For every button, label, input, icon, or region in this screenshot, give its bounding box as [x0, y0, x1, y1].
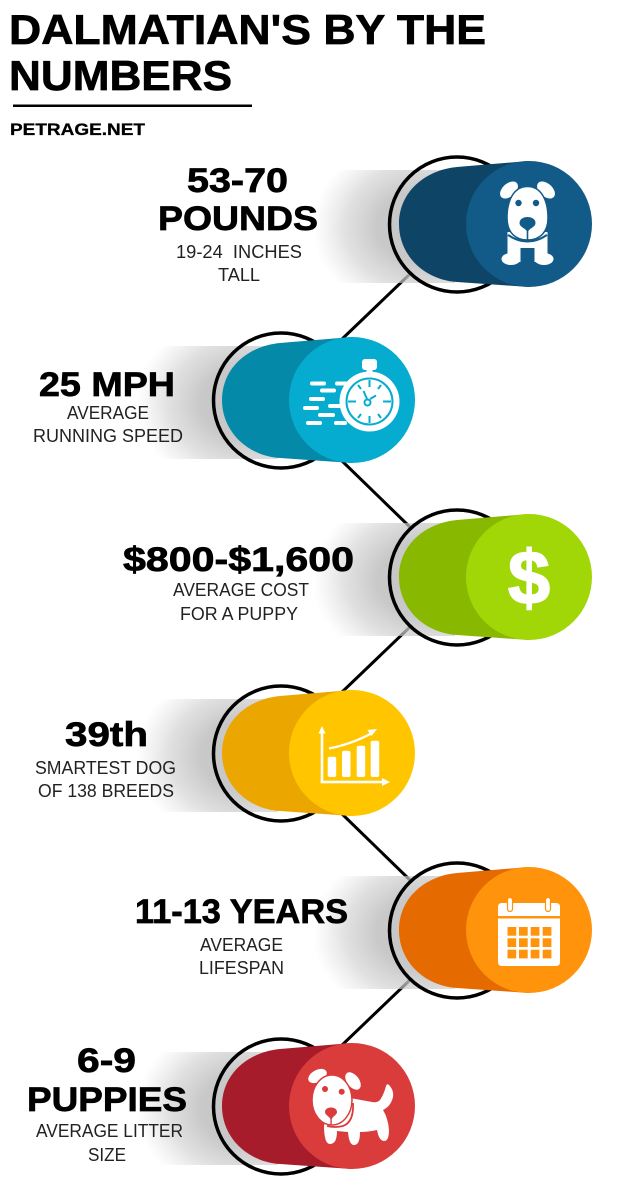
panel: speed [33, 333, 415, 468]
stat: speed [33, 366, 183, 446]
pill [222, 690, 352, 816]
stat: weight: 53-70 [187, 162, 288, 200]
shadow [315, 876, 455, 989]
shadow [315, 523, 455, 636]
panel: weight [158, 157, 592, 292]
pill [222, 1043, 352, 1169]
stat: lifespan: 11-13 YEARS [135, 893, 348, 931]
shadow [315, 170, 455, 283]
pill [222, 337, 352, 463]
stat: lifespan: LIFESPAN [199, 958, 284, 978]
stat: cost: FOR A PUPPY [180, 604, 298, 624]
icon: bar chart [318, 726, 390, 786]
shadow [138, 1052, 278, 1165]
title: NUMBERS [9, 52, 232, 99]
stat: speed: 25 MPH [39, 366, 175, 404]
stat: weight: 19-24 INCHES [176, 242, 302, 262]
icon: dog side [306, 1066, 393, 1145]
stat: lifespan [135, 893, 348, 978]
icon: stopwatch [305, 359, 400, 432]
stat: cost [123, 541, 354, 624]
connector lines [340, 272, 412, 1047]
title [9, 6, 486, 99]
panel: lifespan [135, 863, 592, 998]
shadow [138, 699, 278, 812]
stat: weight: TALL [218, 265, 260, 285]
stat: speed: AVERAGE [67, 403, 149, 423]
panel: litter [27, 1039, 415, 1174]
stat: intelligence: OF 138 BREEDS [38, 781, 174, 801]
ring [214, 333, 348, 468]
stat: intelligence: SMARTEST DOG [35, 758, 176, 778]
stat: litter: SIZE [88, 1145, 126, 1165]
title rule [13, 104, 252, 107]
circle [466, 867, 592, 993]
ring [390, 157, 524, 292]
pill [399, 867, 529, 993]
icon: dog front [497, 178, 558, 265]
shadow [138, 346, 278, 459]
panel: cost [123, 510, 592, 645]
stat: weight [158, 162, 318, 285]
pill [399, 161, 529, 287]
ring [214, 686, 348, 821]
circle [466, 161, 592, 287]
stat: cost: $800-$1,600 [123, 541, 354, 579]
source label: PETRAGE.NET [10, 120, 146, 139]
ring [214, 1039, 348, 1174]
circle [466, 514, 592, 640]
title: DALMATIAN'S BY THE [9, 6, 486, 53]
circle [289, 690, 415, 816]
stat: cost: AVERAGE COST [173, 580, 309, 600]
stat: litter [27, 1042, 187, 1165]
stat: litter: PUPPIES [27, 1081, 187, 1119]
stat: speed: RUNNING SPEED [33, 426, 183, 446]
stat: litter: 6-9 [77, 1042, 136, 1080]
circle [289, 1043, 415, 1169]
stat: intelligence [35, 716, 176, 801]
stat: litter: AVERAGE LITTER [36, 1121, 183, 1141]
circle [289, 337, 415, 463]
pill [399, 514, 529, 640]
icon: calendar [498, 898, 560, 966]
icon: dollar sign: $ [508, 536, 550, 621]
panel: intelligence [35, 686, 415, 821]
stat: lifespan: AVERAGE [200, 935, 283, 955]
ring [390, 863, 524, 998]
ring [390, 510, 524, 645]
stat: weight: POUNDS [158, 200, 318, 238]
stat: intelligence: 39th [65, 716, 148, 754]
